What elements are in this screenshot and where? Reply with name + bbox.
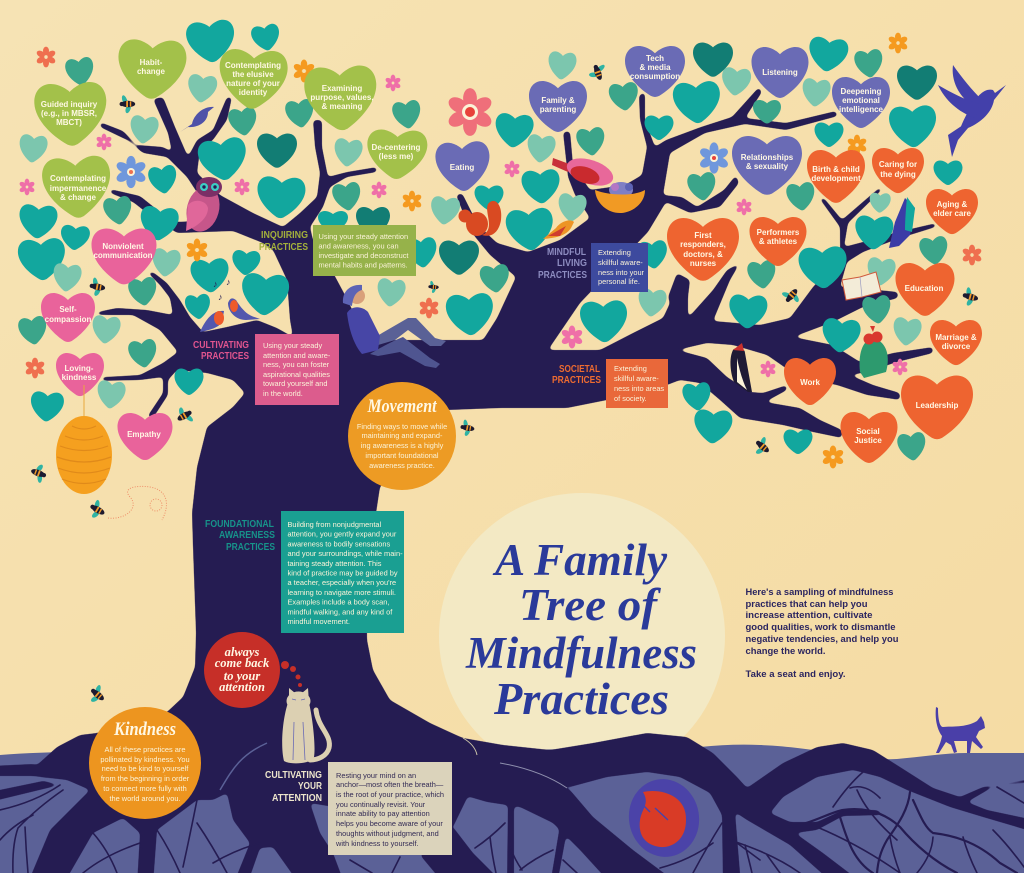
heart: Family & parenting: parenting	[540, 105, 576, 114]
callout: movement: Finding ways to move while	[357, 422, 447, 431]
heart: Tech & media: Tech	[646, 54, 664, 63]
heart: Guided inquiry: Guided inquiry	[41, 100, 98, 109]
callout: kindness: to connect more fully with	[103, 784, 187, 793]
heart: Contemplating identity: Contemplating	[225, 61, 281, 70]
heart: Contemplating identity: nature of your	[226, 79, 280, 88]
heart: Deepening emotional intelligence: emotional	[842, 96, 880, 105]
heading: inquiring practices	[259, 229, 308, 253]
heart: Guided inquiry: MBCT)	[56, 118, 82, 127]
heart: Nonviolent communication: communication	[93, 251, 153, 260]
callout: always come back	[204, 632, 280, 708]
open book	[842, 272, 881, 300]
title	[465, 535, 697, 724]
two birds singing	[200, 298, 260, 332]
heading: cultivating your attention: ATTENTION	[272, 792, 322, 804]
heart: Family & parenting	[529, 81, 587, 132]
panel: mindful living: skillful aware-	[598, 258, 643, 267]
intro text: Take a seat and enjoy.	[746, 669, 846, 679]
panel: cultivating practices	[255, 334, 339, 405]
callout: kindness	[89, 707, 201, 819]
music notes: ♪	[226, 277, 230, 287]
heart: Caring for the dying: Caring for	[879, 160, 917, 169]
thought bubbles	[281, 661, 302, 687]
heading: cultivating practices	[193, 339, 249, 362]
heart: Marriage & divorce: divorce	[942, 342, 971, 351]
heart: Listening: Listening	[762, 68, 798, 77]
heart: Loving-kindness: Loving-	[65, 364, 94, 373]
title circle	[439, 493, 725, 779]
callout: movement: important foundational	[365, 451, 439, 460]
heart: Relationships & sexuality: Relationships	[741, 153, 794, 162]
callout: kindness: from the beginning in order	[101, 774, 190, 783]
heading: cultivating practices: PRACTICES	[201, 350, 249, 362]
heart: Birth & child development	[807, 150, 865, 203]
panel: societal practices: of society.	[614, 394, 647, 403]
heart: Social Justice: Social	[856, 427, 880, 436]
intro text	[746, 587, 898, 679]
heading: cultivating practices: CULTIVATING	[193, 339, 249, 351]
lovebirds	[860, 326, 888, 378]
heading: foundational awareness practices: PRACTICES	[226, 541, 275, 553]
callout: always come back: always	[225, 645, 259, 659]
hearts: societal	[667, 148, 982, 463]
heart: Social Justice: Justice	[854, 436, 882, 445]
heart: Contemplating impermanence: & change	[60, 193, 97, 202]
bird on branch: top left	[180, 107, 214, 132]
callout: kindness: need to be kind to yourself	[102, 764, 189, 773]
panel: societal practices	[606, 359, 668, 408]
heart: Listening	[752, 47, 808, 98]
heart: Self-compassion	[41, 293, 95, 342]
root tendrils	[0, 772, 1024, 873]
panel: inquiring practices: mental habits and patterns.	[318, 260, 408, 270]
panel: cultivating practices: in the world.	[263, 389, 303, 398]
heart: De-centering: De-centering	[372, 143, 421, 152]
panel: cultivating your attention: Resting your mind on an	[336, 771, 416, 780]
panel: cultivating practices: toward yourself and	[263, 379, 328, 388]
heart: Guided inquiry: (e.g., in MBSR,	[41, 109, 97, 118]
heart: Guided inquiry	[33, 81, 109, 148]
heading: societal practices: PRACTICES	[552, 374, 601, 386]
panel: cultivating practices: ness, you can foster	[263, 360, 330, 369]
panel: cultivating your attention: is the root of your practice, which	[336, 790, 444, 799]
heading: foundational awareness practices	[205, 518, 275, 553]
heart: Aging & elder care: Aging &	[937, 200, 968, 209]
hearts: inquiring practices	[33, 39, 428, 220]
heart: First responders: responders,	[680, 240, 726, 249]
flowers	[19, 33, 983, 468]
callout: kindness: All of these practices are	[105, 745, 185, 754]
hearts: cultivating practices	[41, 228, 172, 460]
heart: Examining purpose	[303, 65, 379, 132]
heart: Performers & athletes	[750, 217, 806, 266]
panel: cultivating your attention: you continually revisit. Your	[336, 800, 426, 809]
flower: big pink	[446, 88, 494, 136]
heart: De-centering: (less me)	[379, 152, 414, 161]
heading: mindful living practices: MINDFUL	[547, 246, 586, 258]
heart: Aging & elder care: elder care	[933, 209, 971, 218]
title: Tree of	[519, 580, 661, 630]
heading: mindful living practices	[538, 246, 587, 281]
callout: movement: maintaining and expand-	[362, 431, 443, 440]
beehive	[56, 385, 112, 494]
heart: Eating	[435, 141, 491, 192]
heart: Eating: Eating	[450, 163, 474, 172]
nest with chicks	[595, 182, 645, 213]
heart: Deepening emotional intelligence: intelligence	[839, 105, 884, 114]
title: Mindfulness	[465, 628, 697, 678]
heart: Performers & athletes: Performers	[757, 228, 800, 237]
music notes	[213, 277, 230, 302]
intro text: practices that can help you	[746, 599, 868, 609]
panel: societal practices: Extending	[614, 364, 647, 373]
root highlights	[220, 738, 567, 790]
panel: foundational awareness: taining steady attention. This	[288, 559, 382, 568]
heart: Caring for the dying: the dying	[880, 170, 916, 179]
heart: Empathy: Empathy	[127, 430, 161, 439]
callout: kindness: the world around you.	[109, 794, 181, 803]
panel: mindful living: ness into your	[598, 268, 645, 277]
panel: foundational awareness: attention, you gently expand your	[288, 530, 397, 539]
heart: De-centering	[366, 129, 428, 180]
panel: societal practices: skillful aware-	[614, 374, 659, 383]
heart: Work	[784, 358, 836, 405]
heart: Caring for the dying	[872, 148, 924, 193]
heading: societal practices	[552, 363, 601, 386]
heart: Contemplating impermanence: Contemplating	[50, 174, 106, 183]
panel: foundational awareness: learning to navigate more stimuli.	[288, 588, 396, 597]
panel: inquiring practices: investigate and deconstruct	[318, 251, 408, 260]
title: Practices	[493, 674, 669, 724]
panel: cultivating your attention	[328, 762, 452, 855]
heart: Contemplating impermanence	[41, 155, 113, 220]
walking cat silhouette	[936, 707, 985, 753]
hummingbird	[938, 65, 1006, 157]
heading: foundational awareness practices: AWARENESS	[219, 529, 275, 541]
heart: Marriage & divorce	[930, 320, 982, 365]
panel: foundational awareness: mindful movement.	[288, 617, 350, 626]
heading: cultivating your attention: YOUR	[298, 780, 322, 792]
panel: foundational awareness: mindful walking, and any kind of	[288, 607, 393, 616]
heart: First responders: First	[694, 231, 712, 240]
heart: Self-compassion: compassion	[45, 315, 91, 324]
owl	[182, 177, 224, 235]
panel: cultivating practices: Using your steady	[263, 341, 322, 350]
heart: Leadership: Leadership	[916, 401, 958, 410]
intro text: change the world.	[746, 646, 826, 656]
heading: mindful living practices: LIVING	[557, 257, 587, 269]
panel: mindful living: personal life.	[598, 277, 640, 286]
music notes: ♪	[218, 292, 222, 302]
panel: societal practices: ness into areas	[614, 384, 664, 393]
panel: cultivating practices: attention and aware-	[263, 351, 331, 360]
heart: Contemplating identity: identity	[239, 88, 268, 97]
panel: mindful living	[591, 243, 648, 292]
teal crested bird	[889, 197, 915, 248]
panel: mindful living: Extending	[598, 248, 631, 257]
woodpecker	[730, 343, 752, 392]
callout: kindness: pollinated by kindness. You	[100, 755, 190, 764]
heart: Loving-kindness	[56, 353, 104, 396]
heart: Habit-change: change	[137, 67, 166, 76]
heart: Habit-change	[117, 39, 187, 100]
heading: foundational awareness practices: FOUNDATIONAL	[205, 518, 274, 530]
heart: Work: Work	[800, 378, 820, 387]
panel: cultivating your attention: helps you become aware of your	[336, 819, 443, 828]
heart: Performers & athletes: & athletes	[759, 237, 798, 246]
squirrel	[458, 201, 501, 236]
music notes: ♪	[213, 279, 218, 289]
panel: foundational awareness: awareness to bodily sensations	[288, 539, 391, 548]
heart: Examining purpose: Examining	[322, 84, 362, 93]
panel: cultivating your attention: anchor—most often the breath—	[336, 780, 444, 789]
heading: cultivating your attention	[265, 769, 322, 804]
panel: cultivating your attention: innate ability to pay attention	[336, 809, 430, 818]
callout: movement: awareness practice.	[369, 461, 435, 470]
heart: Deepening emotional intelligence: Deepening	[841, 87, 882, 96]
panel: foundational awareness: a teacher, especially when you're	[288, 578, 396, 587]
panel: foundational awareness	[281, 511, 404, 633]
heart: Deepening emotional intelligence	[832, 77, 890, 128]
intro text: increase attention, cultivate	[746, 610, 872, 620]
heart: Nonviolent communication	[92, 228, 156, 284]
heart: First responders: doctors, &	[683, 250, 723, 259]
panel: inquiring practices	[313, 225, 416, 276]
heart: Marriage & divorce: Marriage &	[935, 333, 977, 342]
panel: foundational awareness: Examples include a body scan,	[288, 598, 389, 607]
heart: Tech & media: & media	[639, 63, 671, 72]
heart: Empathy	[118, 413, 172, 460]
panel: cultivating practices: aspirational qualities	[263, 370, 330, 379]
intro text: negative tendencies, and help you	[746, 634, 898, 644]
heart: Contemplating identity	[218, 48, 289, 111]
small orange bird	[543, 220, 574, 239]
callout: always come back: attention	[219, 680, 265, 694]
heart: Examining purpose: purpose, values,	[310, 93, 374, 102]
callout: kindness: Kindness	[113, 719, 176, 740]
heart: Education	[896, 263, 954, 316]
panel: inquiring practices: Using your steady attention	[318, 232, 408, 241]
heart: Loving-kindness: kindness	[62, 373, 97, 382]
sitting cat	[282, 688, 329, 763]
heart: Social Justice	[840, 412, 898, 463]
panel: foundational awareness: kind of practice may be guided by	[288, 568, 398, 578]
heart: Examining purpose: & meaning	[322, 102, 363, 111]
flower: blue left	[115, 156, 147, 188]
bee trail	[108, 486, 166, 520]
heart: Contemplating identity: the elusive	[232, 70, 274, 79]
heading: mindful living practices: PRACTICES	[538, 269, 587, 281]
heading: inquiring practices: INQUIRING	[261, 229, 308, 241]
panel: cultivating your attention: thoughts without judgment, and	[336, 829, 439, 838]
panel: foundational awareness: Building from nonjudgmental	[288, 520, 382, 529]
heart: Family & parenting: Family &	[541, 96, 575, 105]
heart: First responders: nurses	[690, 259, 717, 268]
heart: Relationships & sexuality	[732, 136, 802, 195]
red bird	[552, 153, 617, 191]
title: A Family	[492, 535, 668, 585]
panel: foundational awareness: and your surroundings, while main-	[288, 549, 403, 558]
callout: always come back: to your	[224, 669, 260, 683]
ground hills	[0, 745, 1024, 873]
heart: Nonviolent communication: Nonviolent	[102, 242, 144, 251]
intro text: good qualities, work to dismantle	[746, 622, 896, 632]
heart: Contemplating impermanence: impermanence	[50, 184, 107, 193]
heart: Aging & elder care	[926, 189, 978, 234]
heart: Tech & media: consumption	[630, 72, 680, 81]
heart: Relationships & sexuality: & sexuality	[746, 162, 789, 171]
flower: blue right	[698, 142, 730, 174]
callout: movement: Movement	[367, 396, 437, 417]
heart: First responders	[667, 218, 739, 281]
person reclining	[343, 285, 446, 368]
heading: societal practices: SOCIETAL	[559, 363, 600, 375]
heart: Birth & child development: development	[811, 174, 861, 183]
callout: movement: ing awareness is a highly	[361, 441, 444, 450]
leaf hearts	[17, 19, 963, 462]
callout: movement	[348, 382, 456, 490]
heart: Education: Education	[905, 284, 943, 293]
heading: inquiring practices: PRACTICES	[259, 241, 308, 253]
callout: always come back: come back	[215, 656, 270, 670]
heart: Tech & media	[625, 46, 685, 97]
intro text: Here's a sampling of mindfulness	[746, 587, 894, 597]
heart: Habit-change: Habit-	[140, 58, 163, 67]
heading: cultivating your attention: CULTIVATING	[265, 769, 322, 781]
heart: Birth & child development: Birth & child	[812, 165, 860, 174]
panel: cultivating your attention: with kindness to yourself.	[335, 839, 419, 848]
bees	[28, 62, 980, 707]
heart: Self-compassion: Self-	[59, 305, 77, 314]
heart: Leadership	[901, 376, 973, 439]
hearts: mindful living	[435, 46, 890, 195]
panel: inquiring practices: and awareness, you can	[318, 242, 399, 250]
fox curled in burrow	[623, 774, 705, 862]
